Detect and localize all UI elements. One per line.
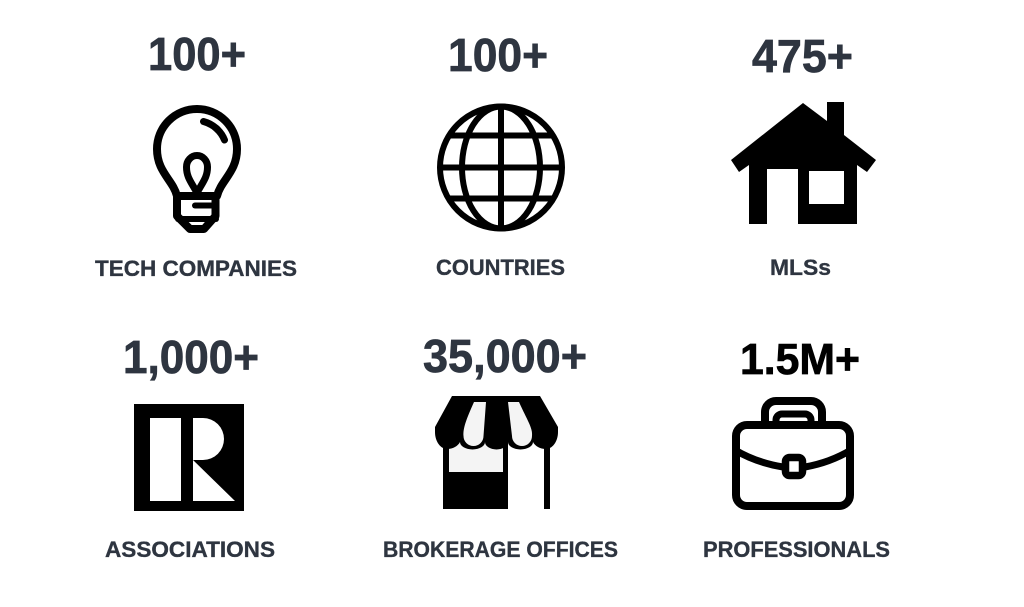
stat: tech companies xyxy=(95,28,297,281)
stat: brokerage offices xyxy=(383,330,618,562)
stat: associations xyxy=(105,331,275,562)
label: tech companies: TECH COMPANIES xyxy=(95,256,297,281)
label: professionals: PROFESSIONALS xyxy=(703,537,890,562)
icon: briefcase xyxy=(735,401,851,506)
icon: globe xyxy=(440,106,562,229)
icon: house xyxy=(731,102,876,224)
icon: realtor R logo xyxy=(134,404,244,511)
number: 35,000+: 35,000+ xyxy=(423,330,587,382)
number: 475+: 475+ xyxy=(752,30,853,82)
stat: professionals xyxy=(703,335,890,562)
label: associations: ASSOCIATIONS xyxy=(105,537,275,562)
stat: countries xyxy=(436,29,565,280)
label: countries: COUNTRIES xyxy=(436,255,565,280)
icon: light bulb xyxy=(157,109,237,229)
label: MLSs: MLSs xyxy=(770,255,831,280)
stat: MLSs xyxy=(731,30,876,280)
number: 100+: 100+ xyxy=(448,29,548,81)
number: 100+: 100+ xyxy=(148,28,246,80)
label: brokerage offices: BROKERAGE OFFICES xyxy=(383,537,618,562)
icon: storefront xyxy=(435,396,558,509)
number: 1.5M+: 1.5M+ xyxy=(740,335,860,384)
number: 1,000+: 1,000+ xyxy=(123,331,259,383)
